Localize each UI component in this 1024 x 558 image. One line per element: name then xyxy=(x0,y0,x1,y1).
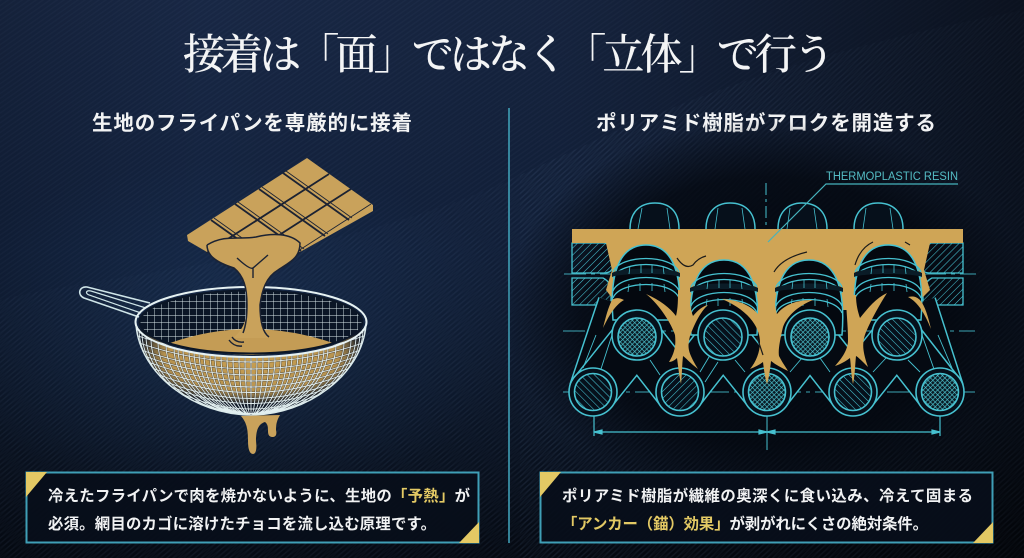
gold corner top-left right box xyxy=(540,472,561,497)
resin surface flow marks xyxy=(677,242,910,355)
icon: chocolate poured into strainer xyxy=(80,158,373,454)
right heading: ポリアミド樹脂がアロクを開造する xyxy=(596,111,936,135)
gold corner bottom-right right box xyxy=(973,522,993,543)
bottom row fibre sections xyxy=(569,368,964,416)
chocolate bar xyxy=(187,158,373,268)
caption text right: ポリアミド樹脂が繊維の奥深くに食い込み、冷えて固まる xyxy=(562,486,973,505)
caption text left: 冷えたフライパンで肉を焼かないように、生地の「予熱」が xyxy=(48,486,471,505)
caption text right: 「アンカー（錨）効果」が剥がれにくさの絶対条件。 xyxy=(562,514,928,533)
crescent domes xyxy=(612,245,922,335)
vertical divider xyxy=(508,108,510,543)
panel: right polyamide anchor diagram xyxy=(503,111,1024,543)
strainer back mesh xyxy=(140,292,362,342)
strainer front bowl xyxy=(136,325,366,417)
caption text left xyxy=(48,486,471,533)
middle row fibre sections xyxy=(612,310,922,360)
strainer rim xyxy=(136,287,366,357)
panel: left frying pan analogy xyxy=(26,111,479,543)
side hatched blocks xyxy=(572,243,963,305)
dark diagram backdrop xyxy=(503,120,1024,500)
melted chocolate pool xyxy=(170,329,333,355)
gold corner top-left xyxy=(26,472,47,497)
thermoplastic resin label: THERMOPLASTIC RESIN xyxy=(826,171,958,183)
caption text right xyxy=(562,486,973,533)
left heading: 生地のフライパンを専厳的に接着 xyxy=(92,111,412,135)
resin leader and label xyxy=(768,171,958,242)
chocolate drips xyxy=(241,415,280,454)
strainer handle xyxy=(80,287,150,317)
diagram: resin and fibre cross-section xyxy=(503,120,1024,500)
caption text left: 必須。網目のカゴに溶けたチョコを流し込む原理です。 xyxy=(48,514,436,533)
caption box left xyxy=(26,472,479,543)
title: 接着は「面」ではなく「立体」で行う xyxy=(183,33,835,79)
centre lines xyxy=(563,183,976,450)
gold corner bottom-right xyxy=(459,522,479,543)
woven fibre tubes xyxy=(583,305,952,392)
resin upper body xyxy=(572,229,963,310)
top fibre arcs xyxy=(630,203,903,229)
dimension line xyxy=(594,416,940,436)
chocolate stream xyxy=(207,235,300,346)
caption box right xyxy=(540,472,993,543)
resin roots xyxy=(603,290,931,384)
